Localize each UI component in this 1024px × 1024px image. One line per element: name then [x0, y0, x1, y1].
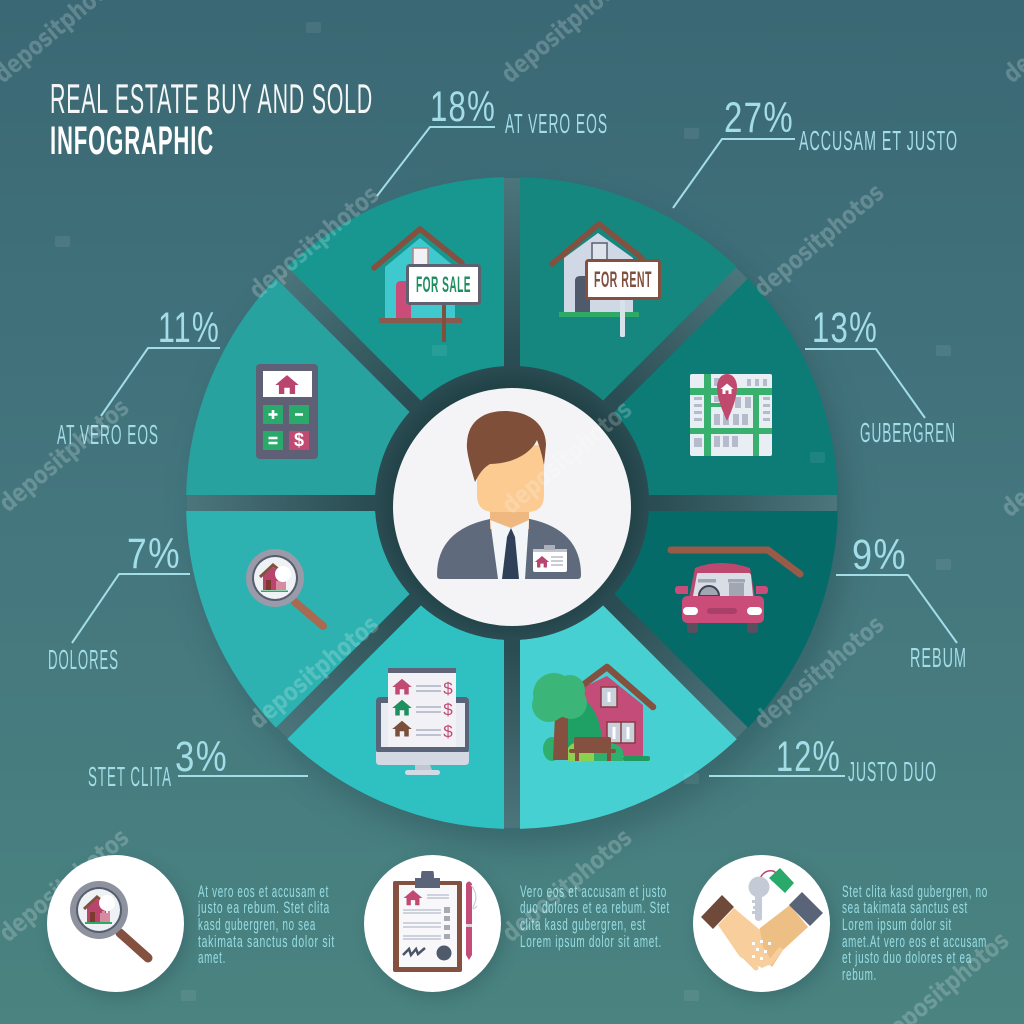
house — [263, 567, 282, 590]
value: 7%: 7% — [127, 530, 181, 578]
monitor base — [376, 752, 469, 765]
text: AT VERO EOS — [57, 419, 159, 450]
house wing — [276, 579, 286, 590]
icon: search property — [246, 549, 323, 626]
headlights — [683, 607, 698, 615]
highlight — [275, 566, 291, 582]
paper — [388, 668, 456, 747]
value: 9%: 9% — [852, 531, 907, 579]
door — [396, 281, 411, 318]
gap disc — [187, 178, 837, 828]
circle — [693, 855, 830, 992]
icon: car under carport — [671, 550, 800, 633]
door — [266, 580, 271, 590]
screen — [381, 703, 465, 747]
connector: 9% — [836, 575, 957, 643]
list lines — [416, 686, 441, 735]
icon: for rent: FOR RENT — [594, 267, 652, 292]
roof — [552, 224, 642, 264]
bottom item 1 — [47, 855, 335, 998]
hair — [467, 411, 546, 482]
trunk — [553, 715, 568, 760]
value: 11%: 11% — [158, 304, 220, 352]
windows — [601, 687, 635, 743]
list prices: $ — [443, 700, 453, 719]
text 1: amet. — [198, 949, 226, 967]
segment: for sale — [287, 177, 504, 401]
text 1 — [197, 883, 335, 967]
grill — [707, 608, 737, 614]
icon: for rent — [552, 224, 660, 337]
circle shadow — [369, 862, 505, 998]
segment: calculator — [186, 278, 410, 495]
house body — [584, 676, 643, 756]
bottom item 2 — [364, 855, 670, 998]
roof — [583, 667, 653, 707]
tree crown — [532, 673, 587, 722]
text 2: Lorem ipsum dolor sit amet. — [520, 933, 662, 951]
house — [275, 375, 299, 394]
magnifier icon — [70, 881, 148, 958]
connector: 12% — [709, 775, 845, 777]
text 2: clita kasd gubergren, est — [520, 916, 646, 934]
text 3: rebum. — [842, 966, 877, 984]
value: 13%: 13% — [812, 304, 878, 352]
rim — [246, 549, 304, 607]
buildings — [694, 378, 770, 447]
cabin — [689, 563, 755, 598]
dark foliage — [560, 700, 602, 760]
label: justo duo: JUSTO DUO — [848, 756, 937, 787]
stand — [415, 765, 432, 770]
badge — [533, 545, 567, 572]
mirrors — [675, 586, 768, 594]
value: 3%: 3% — [175, 733, 228, 781]
house body — [564, 233, 633, 312]
text 1: kasd gubergren, no sea — [198, 916, 316, 934]
bottom item 3 — [693, 855, 988, 998]
lawn — [261, 590, 288, 592]
windshield — [693, 573, 753, 596]
text: AT VERO EOS — [505, 108, 608, 139]
icon: computer listings — [376, 668, 469, 775]
title line 1: REAL ESTATE BUY AND SOLD — [50, 75, 373, 122]
screen — [263, 371, 312, 397]
tie — [502, 528, 519, 579]
icon: calculator — [256, 364, 318, 459]
segment: map — [614, 278, 838, 495]
watermarks: depositphotos — [243, 180, 384, 305]
text 3: Lorem ipsum dolor sit — [842, 916, 952, 934]
face — [477, 445, 544, 512]
buttons: $ — [294, 430, 304, 450]
connector: 3% — [178, 775, 308, 777]
circle — [364, 855, 501, 992]
ground — [623, 756, 650, 761]
icon: for sale — [374, 229, 480, 342]
text: STET CLITA — [88, 761, 172, 792]
segment: search — [186, 511, 410, 728]
pin — [717, 374, 737, 421]
glass — [254, 557, 296, 599]
shirt — [490, 520, 529, 579]
sign — [586, 260, 660, 298]
text: DOLORES — [48, 644, 119, 675]
center disc — [393, 388, 631, 626]
pie chart — [186, 177, 848, 846]
watermarks: depositphotos — [748, 610, 889, 735]
post — [620, 300, 625, 337]
monitor — [376, 697, 469, 753]
bench — [569, 737, 616, 761]
connector: 11% — [101, 348, 220, 416]
suit — [437, 519, 581, 579]
stand foot — [405, 770, 440, 775]
calculator body — [256, 364, 318, 459]
clipboard icon — [393, 871, 477, 972]
segment: for rent — [520, 177, 737, 401]
connector: 18% — [377, 127, 495, 196]
value: 18%: 18% — [430, 83, 496, 131]
car body — [682, 596, 764, 623]
post — [442, 305, 446, 342]
pie shadow — [196, 194, 848, 846]
text 1: At vero eos et accusam et — [198, 883, 329, 901]
wheels — [687, 620, 758, 633]
handshake icon — [701, 868, 823, 968]
icon: house with tree — [532, 667, 653, 762]
list prices: $ — [443, 722, 453, 741]
icon: agent — [437, 411, 581, 579]
door — [575, 276, 590, 312]
text 2: duo dolores et ea rebum. Stet — [520, 899, 670, 917]
connector: 13% — [805, 349, 925, 418]
interior — [698, 579, 745, 596]
connector: 7% — [72, 574, 190, 643]
text 2: Vero eos et accusam et justo — [520, 883, 667, 901]
circle — [47, 855, 184, 992]
list prices — [443, 679, 453, 741]
text 1: justo ea rebum. Stet clita — [197, 899, 330, 917]
circle shadow — [698, 862, 834, 998]
roof — [374, 229, 462, 268]
text 3 — [842, 883, 988, 984]
watermarks: depositphotos — [496, 823, 637, 948]
icon: map — [690, 374, 772, 456]
window — [413, 248, 428, 265]
roads — [690, 374, 772, 456]
connector: 27% — [673, 139, 795, 208]
handle — [295, 602, 323, 626]
value: 12%: 12% — [776, 733, 841, 781]
paper header — [388, 668, 456, 673]
sign — [408, 266, 480, 304]
segment: computer — [287, 605, 504, 829]
bushes — [543, 737, 623, 762]
watermarks: depositphotos — [243, 610, 384, 735]
segment: car — [614, 511, 838, 728]
watermarks: depositphotos — [748, 178, 889, 303]
watermarks: depositphotos — [496, 395, 637, 520]
text 1: takimata sanctus dolor sit — [198, 933, 335, 951]
window — [592, 243, 607, 260]
inner rim — [252, 555, 298, 601]
title line 2: INFOGRAPHIC — [50, 119, 214, 163]
neck — [490, 505, 529, 529]
circle shadow — [52, 862, 188, 998]
title — [50, 75, 373, 163]
ground — [379, 318, 462, 323]
map base — [690, 374, 772, 456]
carport roof — [671, 550, 800, 574]
center ring — [375, 366, 649, 640]
pin house — [720, 384, 734, 394]
list prices: $ — [443, 679, 453, 698]
icon: for sale: FOR SALE — [416, 272, 471, 297]
house roof — [260, 565, 278, 577]
label: rebum: REBUM — [910, 642, 967, 673]
list houses — [392, 679, 412, 736]
text 2 — [520, 883, 670, 951]
value: 27%: 27% — [724, 94, 794, 142]
ground — [559, 312, 639, 317]
segment: house — [520, 605, 737, 829]
house body — [385, 238, 455, 318]
